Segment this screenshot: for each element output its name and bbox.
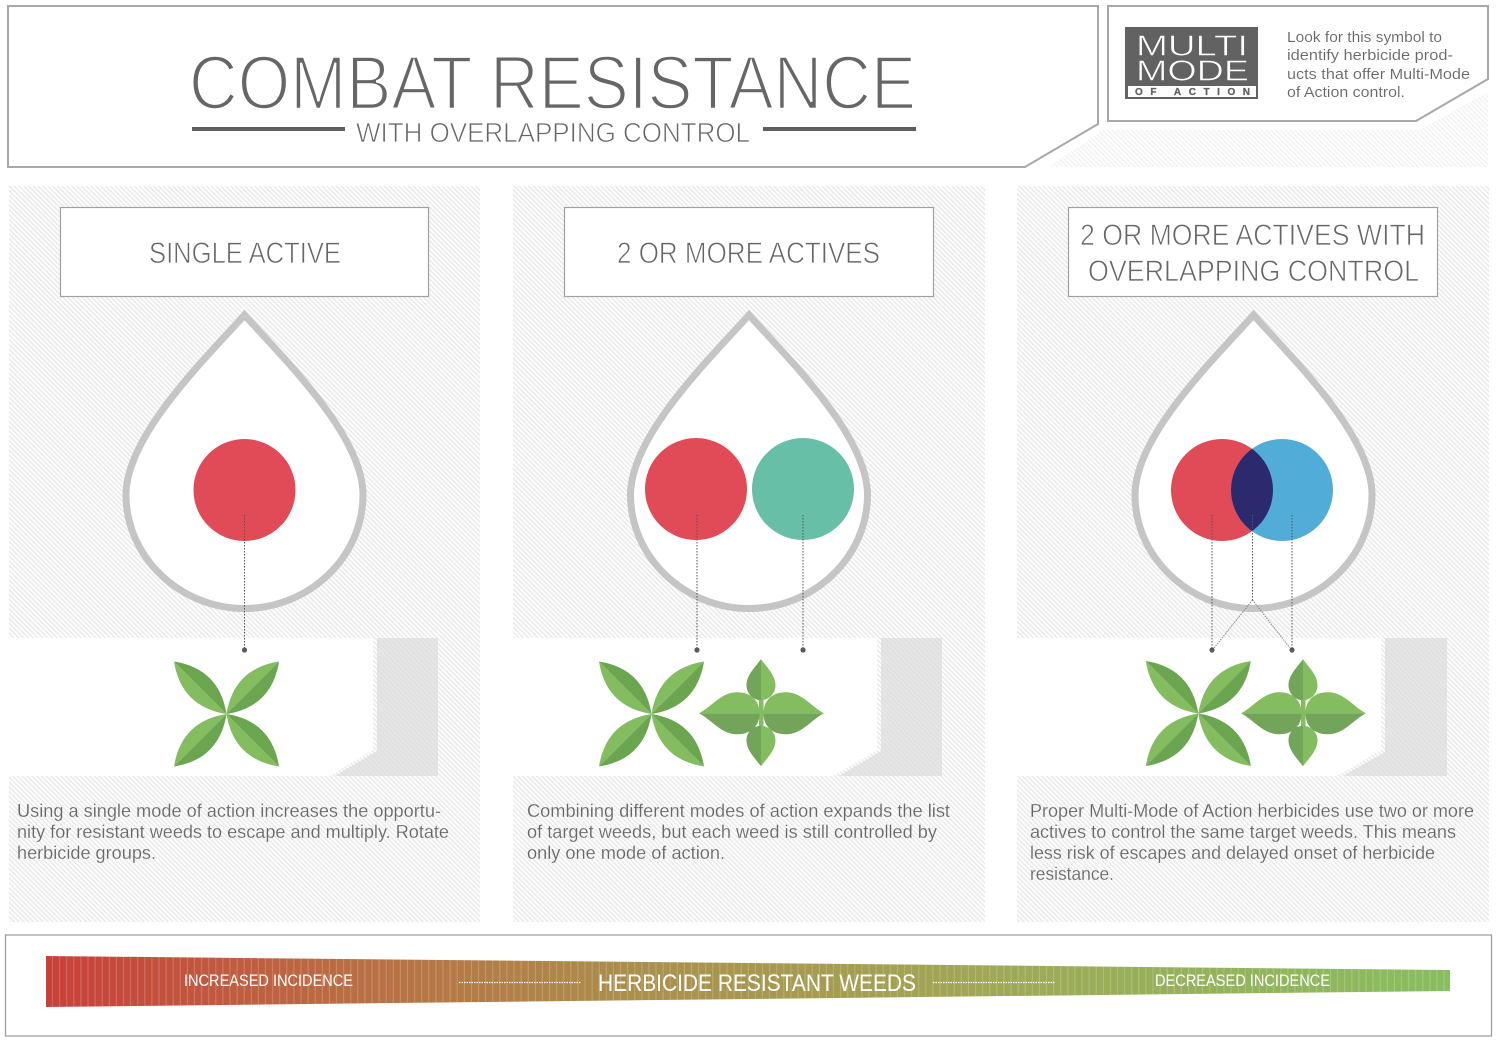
description: less risk of escapes and delayed onset of herbicide: [1030, 843, 1435, 863]
description: [17, 801, 449, 863]
symbol description: of Action control.: [1287, 84, 1405, 101]
heading box: [1068, 208, 1438, 296]
icon: weed one: [1146, 661, 1251, 766]
subtitle: WITH OVERLAPPING CONTROL: [356, 117, 750, 148]
gradient wedge bar: [46, 956, 1450, 1007]
description: [1030, 801, 1474, 884]
panel: resistance scale: [6, 935, 1492, 1036]
dotted rule right: [933, 982, 1055, 984]
heading box: 2 OR MORE ACTIVES WITH: [1080, 219, 1425, 252]
symbol description: ucts that offer Multi-Mode: [1287, 66, 1470, 83]
icon: weed two: [1241, 659, 1366, 766]
connector lines: [694, 515, 806, 653]
icon: multi mode of action logo: MULTI: [1136, 30, 1248, 62]
icon: multi mode of action logo: MODE: [1136, 56, 1249, 88]
icon: multi mode of action logo: [1125, 27, 1258, 99]
background hatch behind header: [1048, 92, 1488, 167]
label: increased incidence: INCREASED INCIDENCE: [184, 971, 353, 990]
heading box: [564, 208, 934, 296]
symbol description: [1287, 29, 1470, 101]
heading box: OVERLAPPING CONTROL: [1088, 255, 1419, 288]
title banner: [8, 6, 1098, 167]
description: Combining different modes of action expands the list: [527, 801, 950, 821]
symbol description: Look for this symbol to: [1287, 29, 1442, 46]
icon: multi mode of action logo: OF ACTION: [1135, 87, 1250, 98]
description: only one mode of action.: [527, 843, 725, 863]
label: herbicide resistant weeds: HERBICIDE RESISTANT WEEDS: [598, 970, 916, 997]
title: COMBAT RESISTANCE: [189, 41, 916, 126]
icon: weed one: [599, 662, 704, 766]
panel: single active: [9, 186, 480, 922]
heading box: SINGLE ACTIVE: [149, 237, 341, 270]
description: Proper Multi-Mode of Action herbicides use two or more: [1030, 801, 1474, 821]
icon: droplet with two actives: [630, 315, 868, 608]
subtitle: [192, 117, 916, 148]
description: nity for resistant weeds to escape and multiply. Rotate: [17, 822, 449, 842]
description: Using a single mode of action increases the opportu-: [17, 801, 441, 821]
panel: overlapping control: [1017, 186, 1489, 922]
connector lines: [1209, 515, 1295, 653]
dotted rule left: [459, 982, 581, 984]
panel: two or more actives: [513, 186, 985, 922]
description: herbicide groups.: [17, 843, 156, 863]
description: actives to control the same target weeds. This means: [1030, 822, 1456, 842]
description: resistance.: [1030, 864, 1114, 884]
symbol description: identify herbicide prod-: [1287, 47, 1453, 64]
connector line: [242, 515, 247, 653]
icon: droplet with overlapping actives: [1135, 315, 1372, 608]
heading box: [60, 208, 428, 296]
description: [527, 801, 950, 863]
icon: droplet with one active: [126, 315, 363, 608]
panel: multi-mode symbol callout: [1108, 6, 1488, 121]
icon: weed: [174, 662, 279, 766]
heading box: 2 OR MORE ACTIVES: [617, 237, 880, 270]
description: of target weeds, but each weed is still controlled by: [527, 822, 937, 842]
label: decreased incidence: DECREASED INCIDENCE: [1155, 971, 1330, 990]
icon: weed two: [699, 659, 824, 766]
